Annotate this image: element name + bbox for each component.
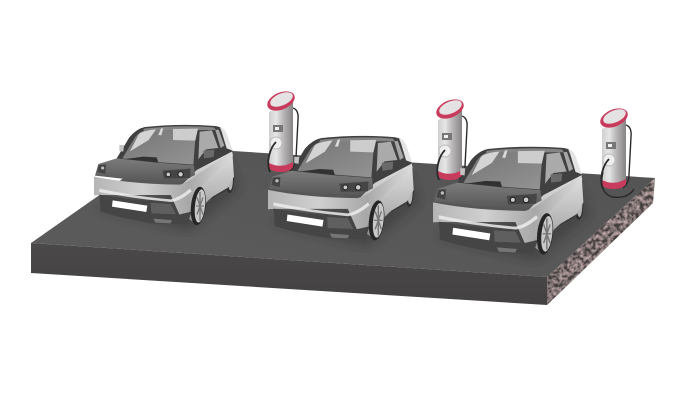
ground slab [31, 147, 655, 305]
car 2 [268, 136, 420, 247]
car 1 [94, 125, 240, 232]
charger 3 floor cable [602, 172, 634, 197]
car 3 [433, 147, 590, 261]
slab: top surface [31, 147, 655, 277]
slab: side edge with soil texture [547, 178, 655, 305]
charger 2 [433, 96, 467, 180]
charger 3 [597, 105, 631, 189]
charger 1 [264, 88, 298, 172]
slab: front edge [31, 243, 547, 305]
